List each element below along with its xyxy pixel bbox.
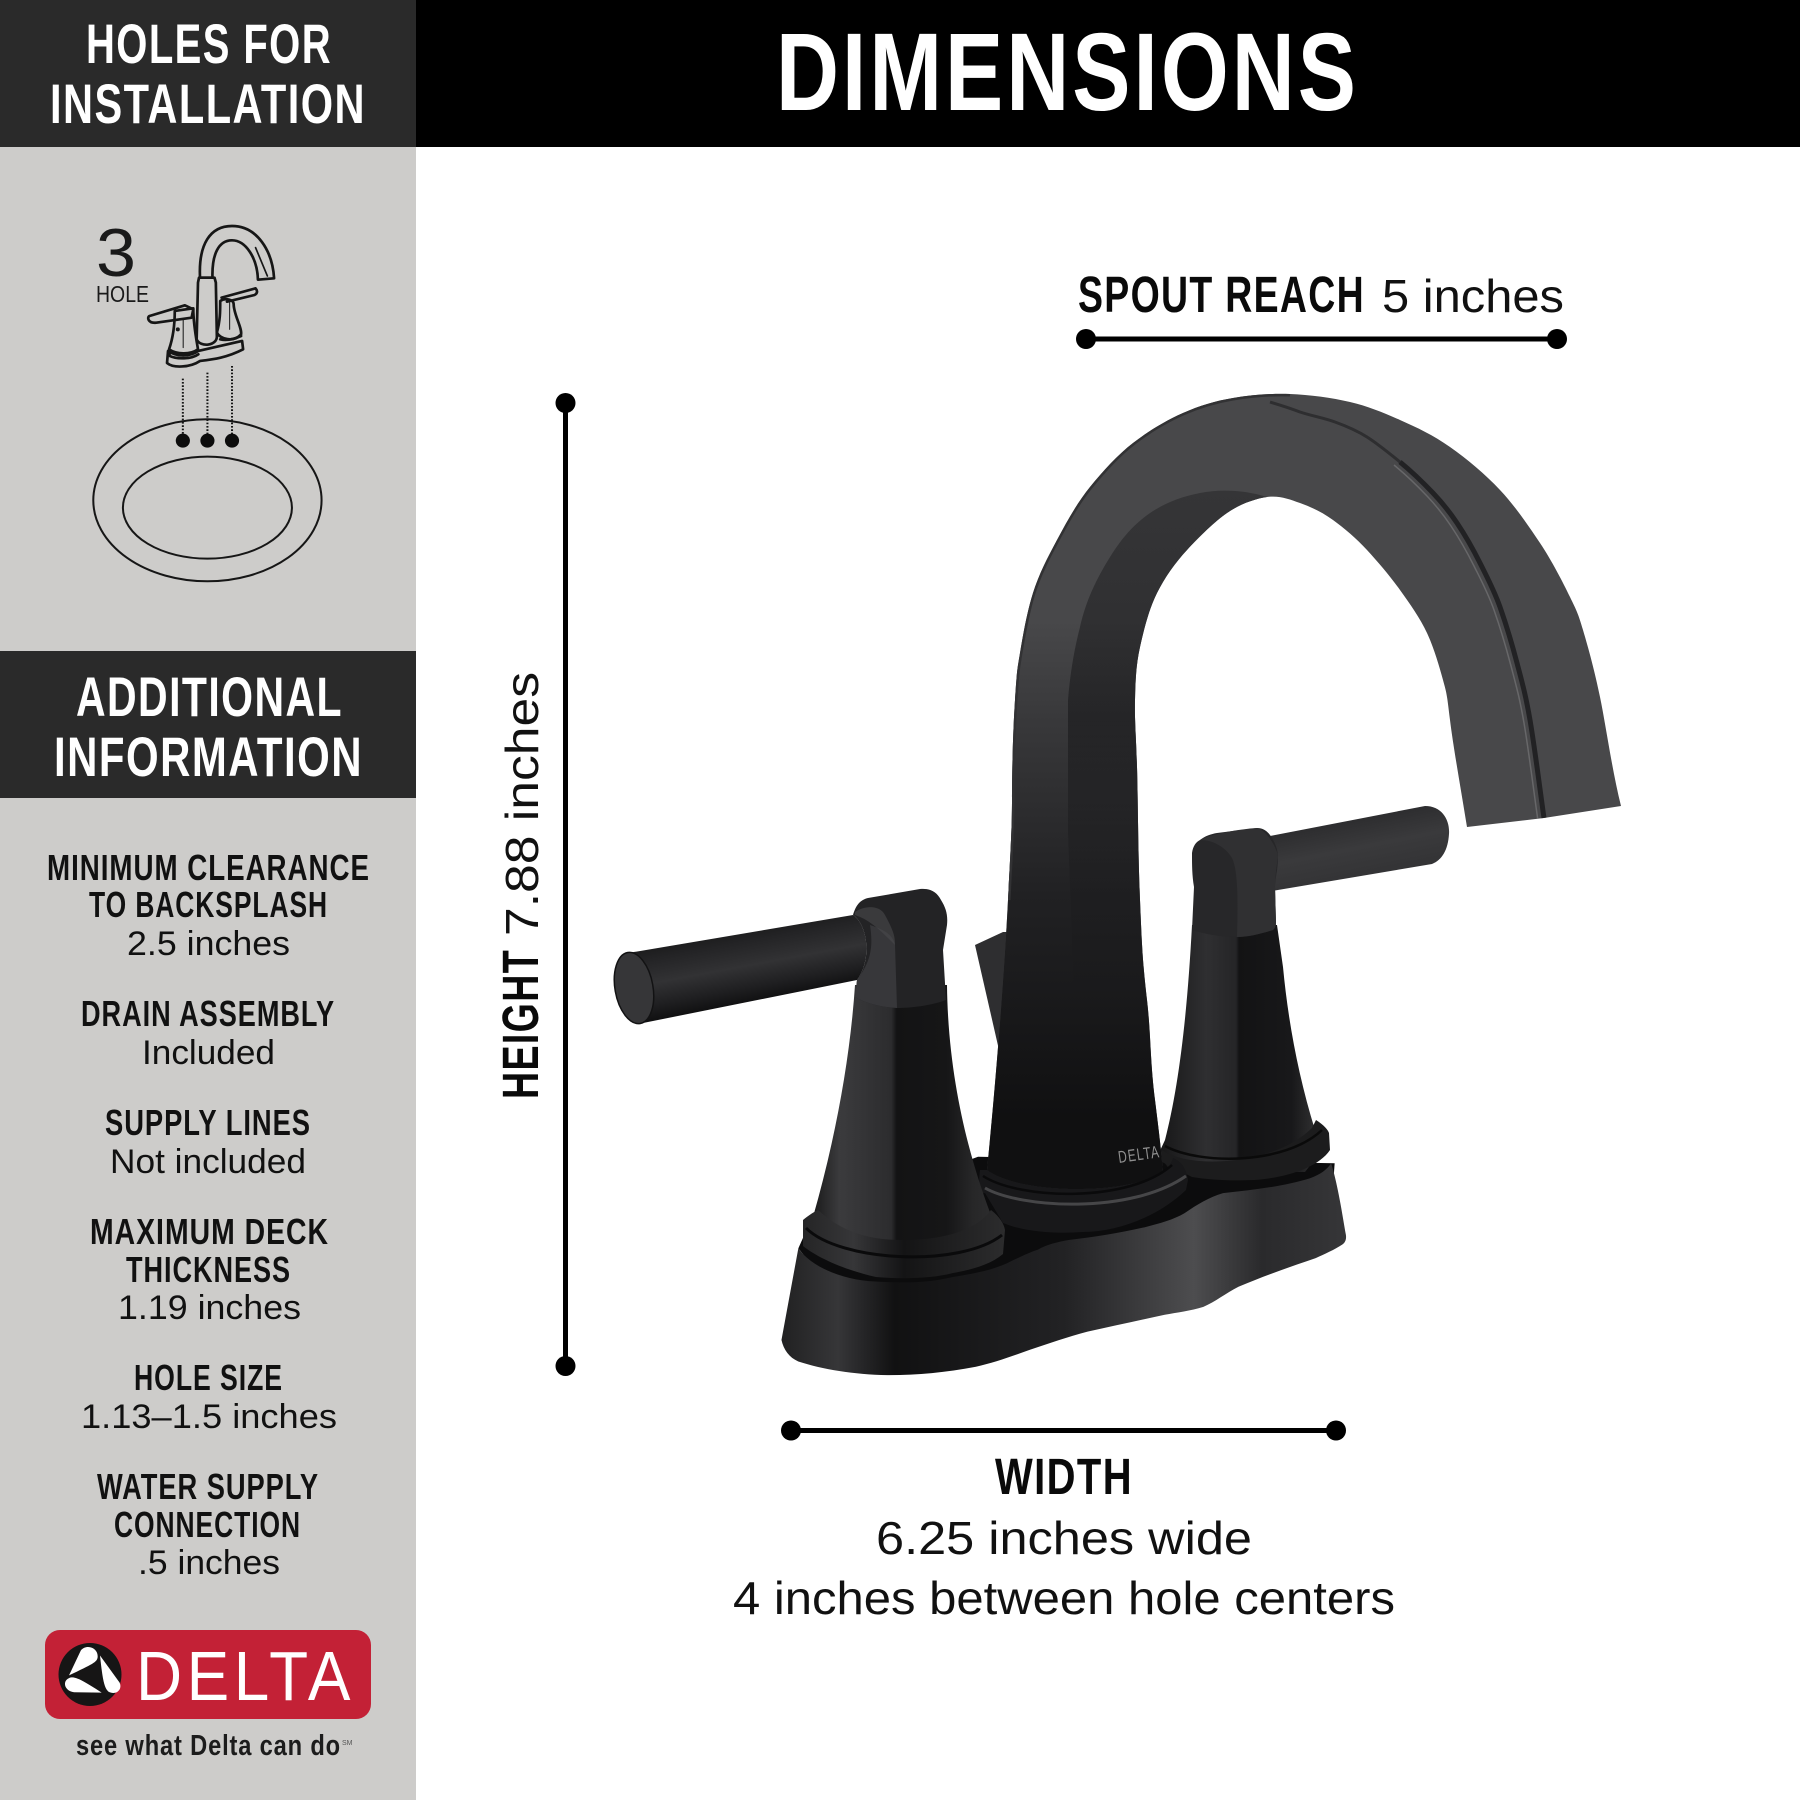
dimension: height — [492, 393, 576, 1376]
heading: additional information — [0, 651, 416, 798]
spec: maximum deck thickness — [90, 1211, 329, 1327]
back right handle — [1158, 806, 1449, 1180]
logo: Delta: DELTA — [136, 1637, 355, 1715]
spec: hole size — [81, 1357, 337, 1436]
dimension: spout reach: 5 inches — [1382, 270, 1564, 322]
spec: minimum clearance — [47, 847, 370, 963]
spec: maximum deck thickness: THICKNESS — [126, 1249, 291, 1290]
spec: supply lines: Not included — [110, 1143, 306, 1181]
spec: minimum clearance: TO BACKSPLASH — [89, 884, 328, 925]
dimension: spout reach — [1076, 266, 1567, 349]
spec: supply lines — [105, 1102, 311, 1181]
spec: minimum clearance: 2.5 inches — [127, 925, 290, 963]
spec: hole size: 1.13–1.5 inches — [81, 1398, 337, 1436]
heading: holes for installation: INSTALLATION — [50, 72, 366, 135]
icon: 3 hole faucet and sink diagram: HOLE — [96, 281, 149, 307]
heading: additional information: INFORMATION — [54, 725, 363, 788]
heading: holes for installation: HOLES FOR — [86, 12, 332, 75]
dimension: width: 4 inches between hole centers — [733, 1572, 1395, 1624]
base plate — [781, 1157, 1346, 1375]
spec: minimum clearance: MINIMUM CLEARANCE — [47, 847, 370, 888]
left sidebar panel — [0, 0, 416, 1800]
text block: specifications list — [47, 847, 370, 1582]
spec: drain assembly: Included — [142, 1034, 275, 1072]
title banner — [416, 0, 1800, 147]
spec: water supply connection: .5 inches — [138, 1544, 280, 1582]
dimension: height: HEIGHT — [492, 949, 549, 1099]
spec: water supply connection: CONNECTION — [114, 1504, 301, 1545]
spec: drain assembly: DRAIN ASSEMBLY — [81, 993, 335, 1034]
logo: Delta: see what Delta can do — [76, 1730, 341, 1762]
spout and riser — [970, 380, 1640, 1210]
spec: drain assembly — [81, 993, 335, 1072]
dimension: spout reach: SPOUT REACH — [1078, 266, 1365, 323]
spec: maximum deck thickness: MAXIMUM DECK — [90, 1211, 329, 1252]
spec: water supply connection — [97, 1466, 319, 1582]
dimension: width: 6.25 inches wide — [876, 1512, 1252, 1564]
heading: additional information: ADDITIONAL — [76, 665, 343, 728]
dimension: height: 7.88 inches — [496, 672, 548, 936]
spec: maximum deck thickness: 1.19 inches — [118, 1289, 301, 1327]
spec: hole size: HOLE SIZE — [134, 1357, 283, 1398]
icon: 3 hole faucet and sink diagram: 3 — [96, 215, 136, 291]
logo: Delta — [45, 1630, 371, 1762]
spec: water supply connection: WATER SUPPLY — [97, 1466, 319, 1507]
faucet photo — [609, 380, 1640, 1375]
dimension: width — [733, 1420, 1395, 1624]
spec: supply lines: SUPPLY LINES — [105, 1102, 311, 1143]
heading: holes for installation — [0, 0, 416, 147]
front left handle — [609, 889, 1005, 1278]
lift rod — [975, 932, 1015, 1050]
logo: Delta: SM — [342, 1740, 353, 1747]
dimension: width: WIDTH — [995, 1448, 1133, 1505]
title banner: DIMENSIONS — [776, 11, 1359, 134]
collar — [979, 1158, 1188, 1233]
logo mark on spout base: DELTA — [1117, 1142, 1161, 1167]
icon: 3 hole faucet and sink diagram — [93, 215, 322, 581]
